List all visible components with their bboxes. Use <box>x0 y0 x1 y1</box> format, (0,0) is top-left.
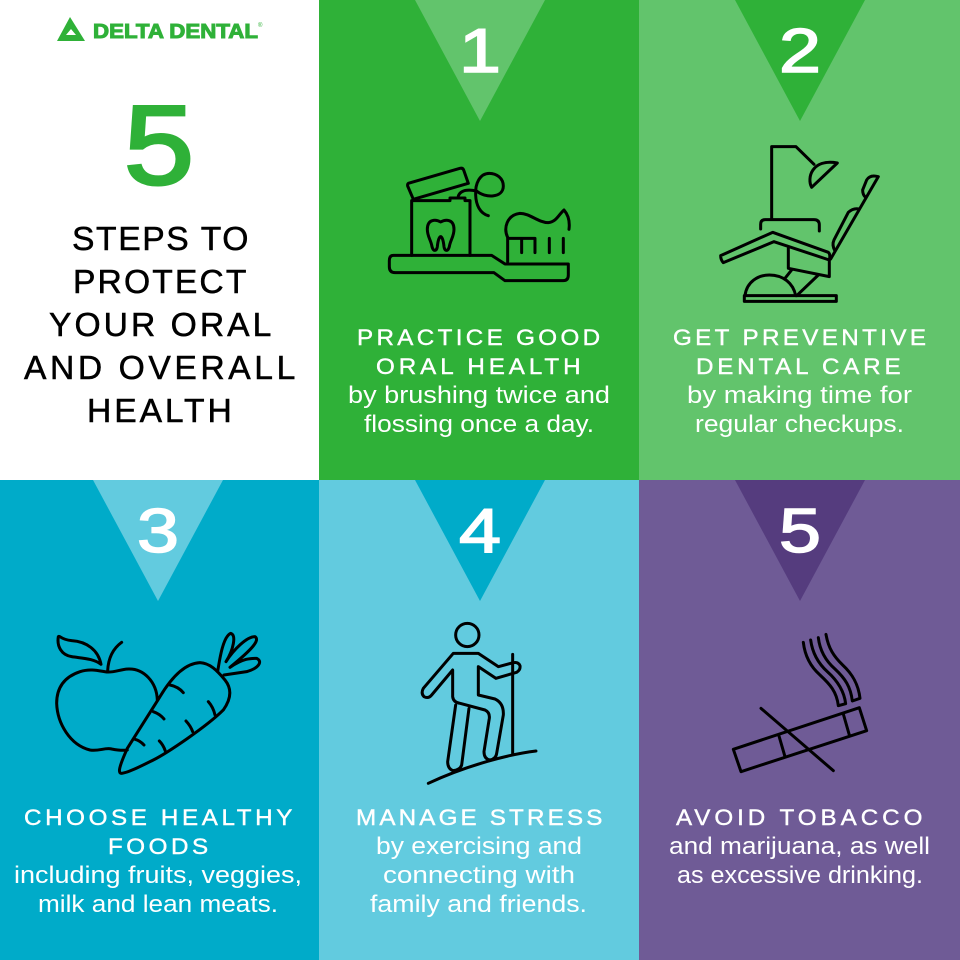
step 4 text: by exercising and <box>376 833 582 860</box>
step 5 text: AVOID TOBACCO <box>676 805 922 830</box>
panel: step 4 <box>319 480 639 960</box>
step 4 text: family and friends. <box>370 891 587 918</box>
number badge 3: 3 <box>137 497 179 566</box>
panel: step 1 <box>319 0 639 480</box>
number badge 2 <box>735 0 865 121</box>
step 3 text: milk and lean meats. <box>38 891 278 918</box>
step 1 text: flossing once a day. <box>364 411 594 438</box>
number badge 1 <box>415 0 545 121</box>
number badge 5: 5 <box>779 497 821 566</box>
heading: STEPS TO <box>72 221 248 258</box>
panel: step 5 <box>639 480 960 960</box>
step 3 text: FOODS <box>108 834 208 859</box>
step 1 text <box>348 325 610 438</box>
panel: step 2 <box>639 0 960 480</box>
step 1 text: by brushing twice and <box>348 382 610 409</box>
number badge 3 <box>93 480 223 601</box>
big number 5: 5 <box>124 83 194 208</box>
step 3 text: CHOOSE HEALTHY <box>24 805 292 830</box>
panel: step 3 <box>0 480 319 960</box>
step 4 text: MANAGE STRESS <box>356 805 602 830</box>
number badge 1: 1 <box>459 17 501 86</box>
icon: hiker <box>422 623 536 783</box>
logo: Delta Dental: DELTA DENTAL <box>93 21 258 43</box>
heading: YOUR ORAL <box>49 307 271 344</box>
step 3 text <box>14 805 302 918</box>
step 2 text <box>673 325 926 438</box>
step 4 text <box>356 805 602 918</box>
icon: dental chair <box>721 147 878 301</box>
step 2 text: DENTAL CARE <box>696 354 901 379</box>
step 5 text <box>669 805 930 889</box>
heading <box>24 221 295 430</box>
step 1 text: ORAL HEALTH <box>376 354 581 379</box>
step 5 text: as excessive drinking. <box>677 862 923 889</box>
number badge 4: 4 <box>459 497 501 566</box>
number badge 4 <box>415 480 545 601</box>
heading: PROTECT <box>73 264 246 301</box>
step 3 text: including fruits, veggies, <box>14 862 302 889</box>
icon: toothbrush, tooth box and floss <box>389 168 569 281</box>
number badge 5 <box>735 480 865 601</box>
heading: AND OVERALL <box>24 350 295 387</box>
panel: intro <box>0 0 319 480</box>
step 2 text: GET PREVENTIVE <box>673 325 926 350</box>
step 1 text: PRACTICE GOOD <box>357 325 600 350</box>
step 4 text: connecting with <box>383 862 575 889</box>
step 5 text: and marijuana, as well <box>669 833 930 860</box>
heading: HEALTH <box>87 393 232 430</box>
step 2 text: by making time for <box>687 382 912 409</box>
logo: Delta Dental <box>57 17 263 43</box>
icon: apple and carrot <box>57 633 260 773</box>
number badge 2: 2 <box>779 17 821 86</box>
step 2 text: regular checkups. <box>695 411 904 438</box>
icon: crossed-out cigarette <box>733 634 867 772</box>
logo: Delta Dental: ® <box>258 22 263 29</box>
